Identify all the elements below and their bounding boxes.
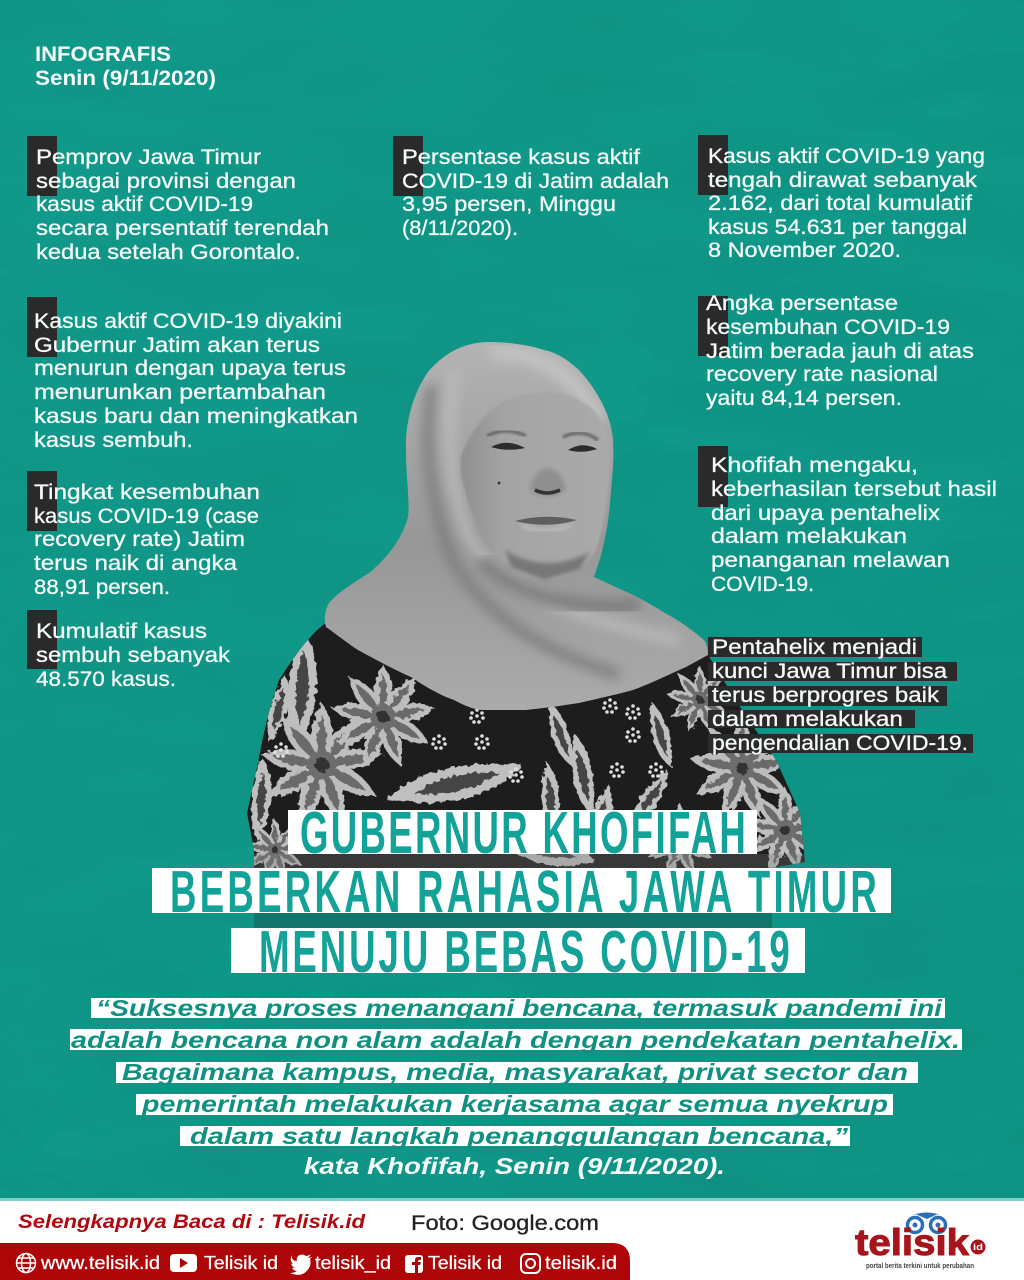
quote: dalam satu langkah penanggulangan bencana,”: [190, 1123, 849, 1149]
quote: pemerintah melakukan kerjasama agar semua nyekrup: [141, 1091, 888, 1117]
text block: kasus aktif dirawat: Kasus aktif COVID-19 yang: [708, 145, 985, 168]
hijab: [325, 342, 708, 710]
text block: kasus aktif diyakini menurun: kasus baru dan meningkatkan: [34, 405, 358, 428]
callout: pentahelix dark highlight: [708, 636, 973, 755]
text block: Khofifah mengaku: Khofifah mengaku,: [711, 454, 918, 477]
social media bar: Telisik id: [204, 1253, 278, 1273]
text block: Khofifah mengaku: [698, 446, 997, 596]
text block: tingkat kesembuhan: [27, 471, 260, 599]
text block: tingkat kesembuhan: 88,91 persen.: [34, 576, 170, 599]
text block: kasus aktif diyakini menurun: Kasus aktif COVID-19 diyakini: [34, 310, 342, 333]
text block: angka persentase kesembuhan: kesembuhan COVID-19: [706, 316, 950, 339]
text block: persentase kasus aktif: Persentase kasus aktif: [402, 146, 640, 169]
logo: telisik.id: id: [973, 1242, 983, 1252]
heading: date label: Senin (9/11/2020): [35, 67, 216, 90]
text block: Pemprov Jawa Timur: kedua setelah Gorontalo.: [36, 241, 301, 264]
text block: kasus aktif diyakini menurun: Gubernur Jatim akan terus: [34, 334, 320, 357]
social media bar: Telisik id: [428, 1253, 502, 1273]
logo: telisik.id: telisik: [855, 1222, 969, 1263]
icon: YouTube: [170, 1254, 197, 1272]
text block: angka persentase kesembuhan: Jatim berada jauh di atas: [706, 340, 974, 363]
text block: Pemprov Jawa Timur: sebagai provinsi dengan: [36, 170, 296, 193]
quote: Bagaimana kampus, media, masyarakat, privat sector dan: [122, 1059, 908, 1085]
social media bar: telisik_id: [315, 1253, 391, 1274]
callout: pentahelix dark highlight: Pentahelix menjadi: [712, 636, 917, 659]
face: [461, 393, 610, 580]
text block: persentase kasus aktif: COVID-19 di Jatim adalah: [402, 170, 669, 193]
quote: kata Khofifah, Senin (9/11/2020).: [304, 1153, 725, 1179]
title: BEBERKAN RAHASIA JAWA TIMUR: [170, 860, 877, 925]
heading: date label: [35, 43, 216, 90]
footer panel: [0, 1198, 1024, 1280]
logo: telisik.id: portal berita terkini untuk perubahan: [866, 1263, 974, 1270]
social media bar: [0, 1243, 630, 1280]
text block: kasus aktif dirawat: kasus 54.631 per tanggal: [708, 216, 967, 239]
heading: date label: INFOGRAFIS: [35, 43, 171, 66]
text block: persentase kasus aktif: [393, 136, 669, 240]
text block: kasus aktif dirawat: [698, 135, 985, 262]
text block: Pemprov Jawa Timur: kasus aktif COVID-19: [36, 193, 253, 216]
text block: tingkat kesembuhan: terus naik di angka: [34, 552, 237, 575]
text block: angka persentase kesembuhan: Angka persentase: [706, 292, 898, 315]
text block: kumulatif kasus sembuh: sembuh sebanyak: [36, 644, 231, 667]
text block: Khofifah mengaku: dari upaya pentahelix: [711, 502, 941, 525]
callout: pentahelix dark highlight: dalam melakukan: [712, 708, 903, 731]
title: MENUJU BEBAS COVID-19: [259, 920, 790, 985]
title: [152, 801, 891, 985]
text block: kasus aktif diyakini menurun: menurunkan pertambahan: [34, 381, 326, 404]
icon: Instagram: [521, 1254, 540, 1273]
callout: pentahelix dark highlight: kunci Jawa Timur bisa: [712, 660, 947, 683]
text block: Khofifah mengaku: COVID-19.: [711, 573, 814, 596]
text block: tingkat kesembuhan: Tingkat kesembuhan: [34, 481, 260, 504]
text block: angka persentase kesembuhan: recovery rate nasional: [706, 363, 938, 386]
text block: angka persentase kesembuhan: yaitu 84,14 persen.: [706, 387, 902, 410]
text block: persentase kasus aktif: (8/11/2020).: [402, 217, 518, 240]
text block: kasus aktif dirawat: tengah dirawat sebanyak: [708, 169, 978, 192]
quote: [70, 995, 962, 1179]
text block: persentase kasus aktif: 3,95 persen, Minggu: [402, 193, 616, 216]
text block: kumulatif kasus sembuh: 48.570 kasus.: [36, 668, 176, 691]
quote: “Suksesnya proses menangani bencana, termasuk pandemi ini: [96, 995, 943, 1021]
portrait: Khofifah in hijab and batik: [240, 342, 829, 928]
text block: tingkat kesembuhan: recovery rate) Jatim: [34, 528, 245, 551]
read-more link: Selengkapnya Baca di : Telisik.id: [18, 1212, 365, 1233]
text block: kumulatif kasus sembuh: [27, 610, 231, 691]
icon: Facebook: [405, 1255, 423, 1273]
text block: Khofifah mengaku: penanganan melawan: [711, 549, 950, 572]
text block: Khofifah mengaku: keberhasilan tersebut hasil: [711, 478, 997, 501]
text block: kasus aktif diyakini menurun: menurun dengan upaya terus: [34, 357, 346, 380]
icon: Twitter: [290, 1254, 312, 1275]
text block: Khofifah mengaku: dalam melakukan: [711, 525, 907, 548]
text block: kasus aktif diyakini menurun: [27, 297, 358, 452]
logo: telisik.id: [855, 1212, 986, 1270]
text block: kasus aktif diyakini menurun: kasus sembuh.: [34, 429, 193, 452]
text block: Pemprov Jawa Timur: secara persentatif terendah: [36, 217, 329, 240]
text block: angka persentase kesembuhan: [698, 292, 974, 410]
callout: pentahelix dark highlight: pengendalian COVID-19.: [712, 732, 968, 755]
batik blouse: [240, 600, 829, 928]
text block: kumulatif kasus sembuh: Kumulatif kasus: [36, 620, 207, 643]
title: GUBERNUR KHOFIFAH: [300, 801, 746, 866]
icon: globe: [16, 1254, 36, 1272]
social media bar: www.telisik.id: [40, 1253, 160, 1273]
text block: Pemprov Jawa Timur: Pemprov Jawa Timur: [36, 146, 261, 169]
text block: tingkat kesembuhan: kasus COVID-19 (case: [34, 505, 259, 528]
text block: kasus aktif dirawat: 8 November 2020.: [708, 239, 901, 262]
quote: adalah bencana non alam adalah dengan pendekatan pentahelix.: [71, 1027, 960, 1053]
text block: Pemprov Jawa Timur: [27, 136, 329, 264]
text block: kasus aktif dirawat: 2.162, dari total kumulatif: [708, 192, 972, 215]
callout: pentahelix dark highlight: terus berprogres baik: [712, 684, 940, 707]
social media bar: telisik.id: [545, 1253, 617, 1273]
photo credit: Foto: Google.com: [411, 1212, 599, 1235]
